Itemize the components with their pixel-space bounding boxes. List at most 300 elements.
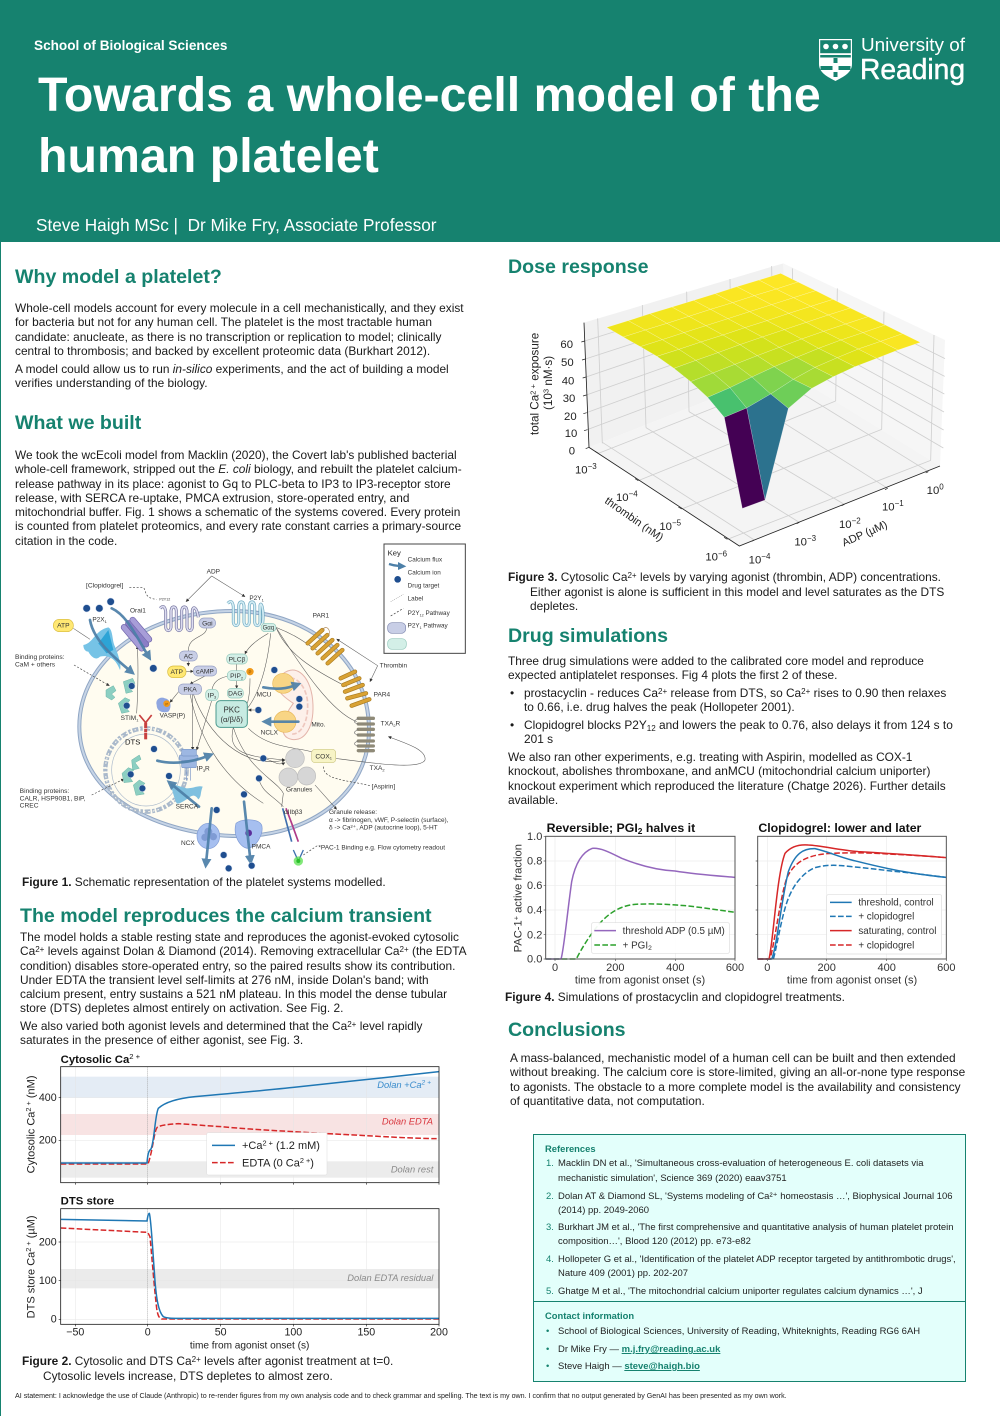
cytosolic panel: 200	[39, 1135, 57, 1147]
pathway pills: ATP	[170, 669, 183, 676]
title: Towards a whole-cell model of the	[38, 68, 821, 122]
logo: University of Reading	[819, 35, 966, 86]
pathway pills: cAMP	[196, 668, 214, 675]
P2Y1 receptor	[228, 602, 263, 626]
key: Calcium flux	[408, 557, 443, 564]
text: conclusions: of quantitative data, not computation.	[510, 1094, 705, 1108]
pathway pills	[53, 618, 336, 763]
ADP axis labels: 10	[927, 485, 939, 497]
ADP axis labels: −4	[761, 552, 771, 561]
schematic labels: MCU	[257, 692, 272, 699]
panel: reversible: active fraction	[513, 844, 525, 916]
PAR1 coils	[308, 627, 342, 663]
caption: figure 4: Figure 4. Simulations of prostacyclin and clopidogrel treatments.	[505, 990, 845, 1004]
panel: reversible: 200	[606, 962, 625, 974]
reference list: 4.	[546, 1254, 554, 1265]
pathway pills: PKC	[223, 705, 240, 714]
legend: )	[310, 1157, 314, 1169]
figure 3: dose response surface: total Ca	[529, 395, 542, 435]
text: what we built: is counted from platelet proteomics, and every rate constant carries a primary-source	[15, 519, 461, 533]
dashed annotation lines	[74, 588, 372, 855]
SERCA pump	[170, 783, 203, 804]
bullet: prostacyclin: to 0.66, i.e. drug halves the peak (Hollopeter 2001).	[524, 700, 795, 714]
schematic labels: PAR4	[374, 692, 391, 699]
cytosolic panel: Dolan +Ca	[377, 1080, 422, 1090]
text: other experiments: knockout experiment which reproduced the literature (Chatge 2026). Further details	[508, 779, 946, 793]
cytosolic panel: (nM)	[25, 1076, 37, 1101]
key: 1	[420, 626, 422, 630]
bullet: clopidogrel: Clopidogrel blocks P2Y12 and lowers the peak to 0.76, also delays it from 124 s to	[524, 718, 953, 733]
figure 3: dose response surface: (10	[542, 393, 555, 410]
ADP axis labels: 10	[882, 501, 895, 513]
schematic labels: α -> fibrinogen, vWF, P-selectin (surface),	[329, 817, 449, 824]
pathway pills: PIP	[230, 673, 241, 680]
pathway pills: DAG	[228, 690, 243, 697]
schematic labels: TXA	[370, 765, 382, 772]
school name: School of Biological Sciences	[34, 38, 227, 53]
text: in-silico: verifies understanding of the biology.	[15, 376, 208, 390]
authors: Steve Haigh MSc | Dr Mike Fry, Associate Professor	[36, 215, 437, 235]
z axis labels	[560, 339, 577, 458]
panel: reversible: PAC-1	[513, 920, 525, 952]
DTS panel: time from agonist onset (s)	[190, 1340, 309, 1351]
text: drug intro	[508, 654, 924, 682]
panel: reversible: 400	[666, 962, 685, 974]
references heading: References	[545, 1143, 596, 1154]
legend: reversible: threshold ADP (0.5 µM)	[623, 926, 725, 937]
text: why model: central to thrombosis; and backed by excellent proteomic data (Burkhart 2012).	[15, 344, 430, 358]
DTS panel: −50	[66, 1327, 84, 1339]
contact list	[546, 1326, 920, 1372]
thrombin axis labels: −3	[588, 462, 597, 471]
schematic labels: Mito.	[311, 721, 326, 728]
P2Y12 receptor	[160, 607, 198, 631]
panel: reversible: 600	[726, 962, 744, 974]
text: drug intro: Three drug simulations were added to the calibrated core model and reproduce	[508, 654, 924, 668]
legend	[207, 1133, 327, 1175]
figure 4: drug simulation charts	[511, 821, 956, 987]
VASP: P	[165, 701, 168, 706]
caption: figure 2: Cytosolic levels increase, DTS depletes to almost zero.	[43, 1369, 333, 1383]
reference list: (2014) pp. 2049-2060	[558, 1205, 649, 1216]
caption: figure 3	[508, 570, 944, 613]
reference list: 5.	[546, 1286, 554, 1297]
figure 3: dose response surface: 2 +	[528, 383, 537, 395]
panel: reversible: 1.0	[527, 831, 542, 843]
reference list: Dolan AT & Diamond SL, 'Systems modeling of Ca²⁺ homeostasis …', Biophysical Journal 106	[558, 1191, 953, 1202]
reference list: 1.	[546, 1158, 554, 1169]
pathway pills: IP	[208, 692, 214, 699]
panel: reversible: +	[511, 916, 520, 920]
caption: figure 2	[22, 1354, 393, 1383]
caption: figure 2: Figure 2. Cytosolic and DTS Ca2+ levels after agonist treatment at t=0.	[22, 1354, 393, 1368]
logo: University of Reading: Reading	[860, 54, 965, 86]
NCX	[197, 823, 220, 849]
contact list: School of Biological Sciences, University of Reading, Whiteknights, Reading RG6 6AH	[558, 1326, 920, 1337]
panel: reversible: 2	[638, 826, 643, 836]
VASP	[156, 698, 171, 712]
cytosolic panel: 400	[39, 1092, 57, 1104]
caption: figure 3: Figure 3. Cytosolic Ca2+ levels by varying agonist (thrombin, ADP) concentrations.	[508, 570, 941, 584]
figure 3: dose response surface: 3	[542, 389, 551, 393]
orange phospho marker: P	[249, 669, 252, 674]
PAC-1 glow	[294, 856, 303, 866]
text: why model: Whole-cell models account for every molecule in a cell mechanistically, and they exist	[15, 301, 464, 315]
z axis labels: 30	[563, 393, 575, 405]
title	[38, 68, 821, 183]
schematic labels: DTS	[125, 737, 140, 746]
thrombin axis labels: 10	[616, 492, 629, 504]
IP3 receptor	[179, 749, 198, 781]
cytosolic panel	[24, 1052, 439, 1185]
bullet: prostacyclin: prostacyclin - reduces Ca2+ release from DTS, so Ca2+ rises to 0.90 then relaxes	[524, 686, 946, 700]
z axis labels: 50	[561, 357, 574, 369]
figure 2: calcium traces	[24, 1052, 448, 1351]
text: in-silico	[15, 362, 449, 390]
legend: clopidogrel: saturating, control	[858, 926, 936, 937]
ADP axis labels: −2	[852, 517, 861, 526]
bullet: prostacyclin	[510, 686, 946, 714]
heading: dose response: Dose response	[508, 256, 648, 278]
ADP axis labels: −1	[895, 499, 904, 508]
schematic labels: Binding proteins:	[20, 788, 69, 795]
figure 3: dose response surface: thrombin (nM)	[602, 495, 665, 544]
reference list	[546, 1158, 956, 1297]
schematic labels: αIIbβ3	[284, 809, 303, 816]
text: what we built: citation in the code.	[15, 534, 117, 548]
pathway pills: 1	[330, 756, 333, 761]
legend: clopidogrel: + clopidogrel	[858, 940, 914, 951]
DTS panel: (µM)	[25, 1215, 37, 1241]
pathway pills: 2	[241, 675, 244, 680]
text: why model: for bacteria but not for any human cell. The platelet is the most tractable human	[15, 315, 432, 329]
heading: why model: Why model a platelet?	[15, 266, 222, 288]
text: agonist levels: We also varied both agonist levels and determined that the Ca2+ level rapidly	[20, 1019, 422, 1033]
pathway pills: COX	[315, 753, 330, 760]
panel: reversible: 0	[552, 962, 558, 974]
thrombin axis labels: 10	[659, 521, 672, 533]
contact list: Dr Mike Fry — m.j.fry@reading.ac.uk	[558, 1344, 720, 1355]
DTS panel: 100	[39, 1275, 57, 1287]
DTS panel: 100	[284, 1327, 302, 1339]
contact list: •	[546, 1326, 549, 1337]
page edge	[0, 242, 1, 1416]
ADP axis labels: 0	[939, 483, 944, 492]
schematic labels: Binding proteins:	[15, 654, 65, 661]
pathway pills: Gαi	[202, 620, 213, 627]
text: other experiments: knockout, abolishes thromboxane, and anMCU (mitochondrial calcium uniporter)	[508, 764, 930, 778]
text: calcium transient: Under EDTA the transient level self-limits at 276 nM, inside Dolan's band; with	[20, 973, 429, 987]
figure 3: dose response surface: nM·s)	[542, 356, 555, 389]
ADP axis labels	[749, 483, 944, 566]
schematic labels: TXA	[381, 721, 393, 728]
DTS panel: 200	[430, 1327, 448, 1339]
schematic labels: Thrombin	[380, 663, 408, 670]
text: why model: candidate: anucleate, as there is no transcription or replication to model; clinically	[15, 330, 441, 344]
title: human platelet	[38, 129, 379, 183]
Orai1 channel	[124, 620, 149, 648]
legend: +Ca	[242, 1140, 262, 1152]
z axis labels: 10	[565, 428, 577, 440]
legend: 2 +	[262, 1139, 273, 1148]
schematic labels: 1	[105, 619, 108, 624]
cytosolic panel: 2 +	[24, 1101, 33, 1112]
thrombin axis labels	[575, 462, 728, 564]
schematic labels: 2	[393, 723, 396, 728]
legend: (1.2 mM)	[273, 1140, 320, 1152]
key: P2Y	[408, 610, 420, 617]
text: calcium transient: The model holds a stable resting state and reproduces the agonist-evoked cytosolic	[20, 930, 459, 944]
AI statement: AI statement: I acknowledge the use of Claude (Anthropic) to re-render figures from my own analysis code and to check grammar and spelling. The text is my own. I confirm that no output generated by GenAI has been presented as my own work.	[15, 1392, 787, 1400]
caption: figure 3: Either agonist is alone is sufficient in this model and level saturates as the DTS	[530, 584, 944, 598]
cytosolic panel: Cytosolic Ca	[61, 1054, 129, 1066]
calcium ions	[83, 598, 303, 872]
contact list: Steve Haigh — steve@haigh.bio	[558, 1361, 700, 1372]
z axis labels: 40	[562, 375, 574, 387]
text: calcium transient: store (DTS) depletes almost entirely on activation. See Fig. 2.	[20, 1001, 343, 1015]
schematic labels: CALR, HSP90B1, BiP,	[20, 796, 86, 803]
pathway pills: ATP	[57, 622, 70, 629]
text: what we built: We took the wcEcoli model from Macklin (2020), the Covert lab's published bacterial	[15, 448, 457, 462]
text: calcium transient: calcium present, entry sustains a 521 nM plateau. In this model the dense tubular	[20, 987, 447, 1001]
bullet: prostacyclin: •	[510, 686, 514, 700]
pathway pills: 3	[214, 695, 217, 700]
schematic labels: P2X	[92, 617, 105, 624]
schematic labels: 2	[382, 767, 385, 772]
thrombin axis labels: 10	[575, 464, 588, 476]
text: agonist levels: saturates in the presence of either agonist, see Fig. 3.	[20, 1033, 303, 1047]
panel: clopidogrel: 200	[817, 962, 836, 974]
DTS panel: DTS store Ca	[25, 1252, 37, 1318]
legend: reversible: 2	[648, 945, 652, 952]
surface	[607, 273, 920, 508]
regulatory lines	[73, 576, 425, 809]
schematic labels: Orai1	[130, 608, 146, 615]
caption: figure 3: depletes.	[530, 599, 578, 613]
integrin	[283, 808, 303, 861]
cytosolic panel: 2 +	[421, 1080, 431, 1087]
DTS panel: 50	[215, 1327, 227, 1339]
binding proteins	[106, 678, 145, 795]
figure 3: dose response surface: exposure	[529, 333, 542, 384]
text: other experiments	[508, 750, 946, 807]
panel: reversible: 0.6	[527, 880, 542, 892]
reference list: Ghatge M et al., 'The mitochondrial calcium uniporter regulates calcium dynamics …', J	[558, 1286, 923, 1297]
figure 1: platelet schematic	[15, 544, 466, 872]
reference list: 2.	[546, 1191, 554, 1202]
reference list: Macklin DN et al., 'Simultaneous cross-evaluation of heterogeneous E. coli datasets via	[558, 1158, 924, 1169]
text: why model	[15, 301, 464, 358]
cytosolic panel: 2 +	[129, 1052, 141, 1061]
key: 12	[420, 613, 424, 617]
axes panes	[581, 263, 945, 546]
schematic labels: SERCA	[176, 804, 199, 811]
schematic labels: R	[396, 721, 401, 728]
schematic labels: ADP	[207, 568, 220, 575]
figure 3: dose response surface: ADP (µM)	[840, 519, 889, 549]
text: calcium transient	[20, 930, 467, 1015]
panel: reversible: halves it	[642, 821, 695, 835]
ADP axis labels: 10	[794, 536, 807, 548]
pathway pills: PKA	[183, 686, 197, 693]
key: Calcium ion	[408, 570, 441, 577]
ADP axis labels: 10	[749, 554, 761, 566]
panel: clopidogrel: 400	[877, 962, 896, 974]
legend: 2 +	[300, 1156, 310, 1165]
DTS panel: DTS store	[61, 1196, 114, 1208]
thrombin axis labels: 10	[705, 552, 718, 564]
TXA2 receptor coils	[354, 718, 373, 751]
schematic labels: P2Y	[249, 595, 262, 602]
DTS panel	[24, 1196, 448, 1351]
thrombin axis labels: −6	[718, 549, 728, 558]
cytosolic panel: Cytosolic Ca	[25, 1112, 37, 1173]
ADP axis labels: 10	[839, 519, 852, 531]
DTS panel: 0	[51, 1314, 57, 1326]
schematic labels: *PAC-1 Binding e.g. Flow cytometry readout	[318, 845, 445, 852]
caption: figure 1: Figure 1. Schematic representation of the platelet systems modelled.	[22, 875, 386, 889]
bullet: clopidogrel	[510, 718, 953, 746]
panel: reversible: time from agonist onset (s)	[575, 975, 705, 987]
reference list: 3.	[546, 1222, 554, 1233]
legend: clopidogrel: threshold, control	[858, 898, 934, 909]
contact list: •	[546, 1344, 549, 1355]
cell body	[79, 611, 369, 836]
schematic labels: PAR1	[313, 613, 330, 620]
schematic labels: Granules	[286, 787, 313, 794]
text: drug intro: expected antiplatelet responses. Fig 4 plots the first 2 of these.	[508, 668, 837, 682]
logo: University of Reading: University of	[861, 35, 966, 55]
text: conclusions: without breaking. The calcium core is store-limited, giving an all-or-none type response	[510, 1065, 965, 1079]
schematic labels: STIM	[121, 715, 136, 722]
figure 3: dose response surface	[528, 264, 945, 566]
panel: clopidogrel	[756, 821, 956, 987]
schematic labels: δ -> Ca²⁺, ADP (autocrine loop), 5-HT	[329, 825, 438, 832]
text: what we built	[15, 448, 462, 548]
DTS panel: 0	[145, 1327, 151, 1339]
DTS panel: 2 +	[24, 1241, 33, 1252]
key: Pathway	[422, 623, 449, 630]
cytosolic panel: Dolan EDTA	[382, 1116, 433, 1126]
panel: reversible: 0.8	[527, 856, 542, 868]
STIM1	[139, 715, 152, 739]
contact list: •	[546, 1361, 549, 1372]
schematic labels: PMCA	[252, 844, 271, 851]
text: calcium transient: Ca2+ levels against Dolan & Diamond (2014). Removing extracellular Ca2+ (the EDTA	[20, 944, 467, 958]
text: conclusions	[510, 1051, 965, 1108]
reference list: Nature 409 (2001) pp. 202-207	[558, 1268, 688, 1279]
legend: reversible	[592, 923, 729, 953]
text: what we built: release, with SERCA re-uptake, PMCA extrusion, store-operated entry, and	[15, 491, 409, 505]
legend: EDTA (0 Ca	[242, 1157, 300, 1169]
granules	[279, 749, 316, 787]
text: agonist levels	[20, 1019, 422, 1047]
reference list: composition…', Blood 120 (2012) pp. e73-e82	[558, 1236, 751, 1247]
text: what we built: release pathway in its place: agonist to Gq to PLC-beta to IP3 to IP3-receptor store	[15, 477, 451, 491]
divider	[534, 1301, 965, 1302]
schematic labels: NCLX	[261, 730, 279, 737]
schematic labels: 1	[136, 717, 139, 722]
heading: drug simulations: Drug simulations	[508, 625, 668, 647]
bullet: clopidogrel: •	[510, 718, 514, 732]
text: conclusions: to agonists. The obstacle to a more complete model is the availability and consistency	[510, 1080, 961, 1094]
schematic labels: R	[205, 766, 210, 773]
text: in-silico: A model could allow us to run in-silico experiments, and the act of building a model	[15, 362, 449, 376]
contact heading: Contact information	[545, 1310, 634, 1321]
schematic labels: [Aspirin]	[372, 784, 395, 791]
thrombin axis labels: −4	[629, 490, 638, 499]
schematic labels	[15, 568, 449, 852]
heading: calcium transient: The model reproduces the calcium transient	[20, 905, 432, 927]
heading: conclusions: Conclusions	[508, 1019, 626, 1041]
panel: clopidogrel: Clopidogrel: lower and later	[758, 821, 922, 835]
panel: references and contact	[533, 1134, 966, 1382]
text: what we built: mitochondrial buffer. Fig. 1 shows a schematic of the systems covered. Every protein	[15, 505, 460, 519]
panel: reversible	[511, 821, 744, 987]
DTS panel: Dolan EDTA residual	[347, 1273, 434, 1283]
z axis labels: 20	[564, 411, 577, 423]
key: Drug target	[408, 583, 440, 590]
text: what we built: whole-cell framework, stripped out the E. coli biology, and rebuilt the platelet calcium-	[15, 462, 462, 476]
key: Pathway	[424, 610, 451, 617]
schematic labels: P2Y12	[159, 598, 170, 602]
text: other experiments: We also ran other experiments, e.g. treating with Aspirin, modelled as COX-1	[508, 750, 912, 764]
ADP axis labels: −3	[807, 534, 817, 543]
schematic labels: 3	[203, 768, 206, 773]
text: other experiments: available.	[508, 793, 558, 807]
DTS panel: 150	[357, 1327, 375, 1339]
schematic labels: 1	[262, 597, 265, 602]
reference list: Hollopeter G et al., 'Identification of the platelet ADP receptor targeted by antithrombotic drugs',	[558, 1254, 956, 1265]
panel: reversible: 0.0	[527, 954, 542, 966]
PAR4 coils	[341, 672, 369, 706]
schematic labels: IP	[197, 766, 203, 773]
schematic labels: [Clopidogrel]	[86, 583, 124, 590]
orange phospho marker	[246, 668, 254, 675]
heading: what we built: What we built	[15, 412, 141, 434]
z axis labels: 60	[560, 339, 573, 351]
reference list: Burkhart JM et al., 'The first comprehensive and quantitative analysis of human platelet protein	[558, 1222, 954, 1233]
text: conclusions: A mass-balanced, mechanistic model of a human cell can be built and then extended	[510, 1051, 956, 1065]
key: Key	[388, 548, 401, 557]
calcium flux arrows	[90, 608, 298, 860]
panel: reversible: Reversible; PGI	[547, 821, 638, 835]
legend: clopidogrel: + clopidogrel	[858, 912, 914, 923]
legend: clopidogrel	[827, 895, 942, 954]
schematic labels: CaM + others	[15, 662, 56, 669]
schematic labels: NCX	[181, 840, 195, 847]
thrombin axis labels: −5	[672, 519, 682, 528]
panel: clopidogrel: 0	[764, 962, 770, 974]
bullet: clopidogrel: 201 s	[524, 732, 553, 746]
panel: clopidogrel: 600	[937, 962, 956, 974]
text: calcium transient: condition) disables store-operated entry, so the paired results show its contribution.	[20, 959, 455, 973]
legend: reversible: + PGI	[623, 940, 648, 951]
mitochondrion	[273, 670, 313, 740]
PMCA	[235, 820, 262, 848]
dense tubular store	[105, 728, 187, 812]
panel: clopidogrel: time from agonist onset (s)	[787, 975, 917, 987]
key	[384, 544, 465, 653]
header band	[0, 0, 1000, 242]
schematic labels: VASP(P)	[160, 713, 185, 720]
key: Label	[408, 596, 423, 603]
pathway pills: PLCβ	[229, 656, 246, 663]
P2X1 channel	[83, 627, 120, 670]
pathway pills: (α/β/δ)	[220, 715, 243, 724]
DTS panel: 200	[39, 1236, 57, 1248]
schematic labels: Granule release:	[329, 809, 377, 816]
